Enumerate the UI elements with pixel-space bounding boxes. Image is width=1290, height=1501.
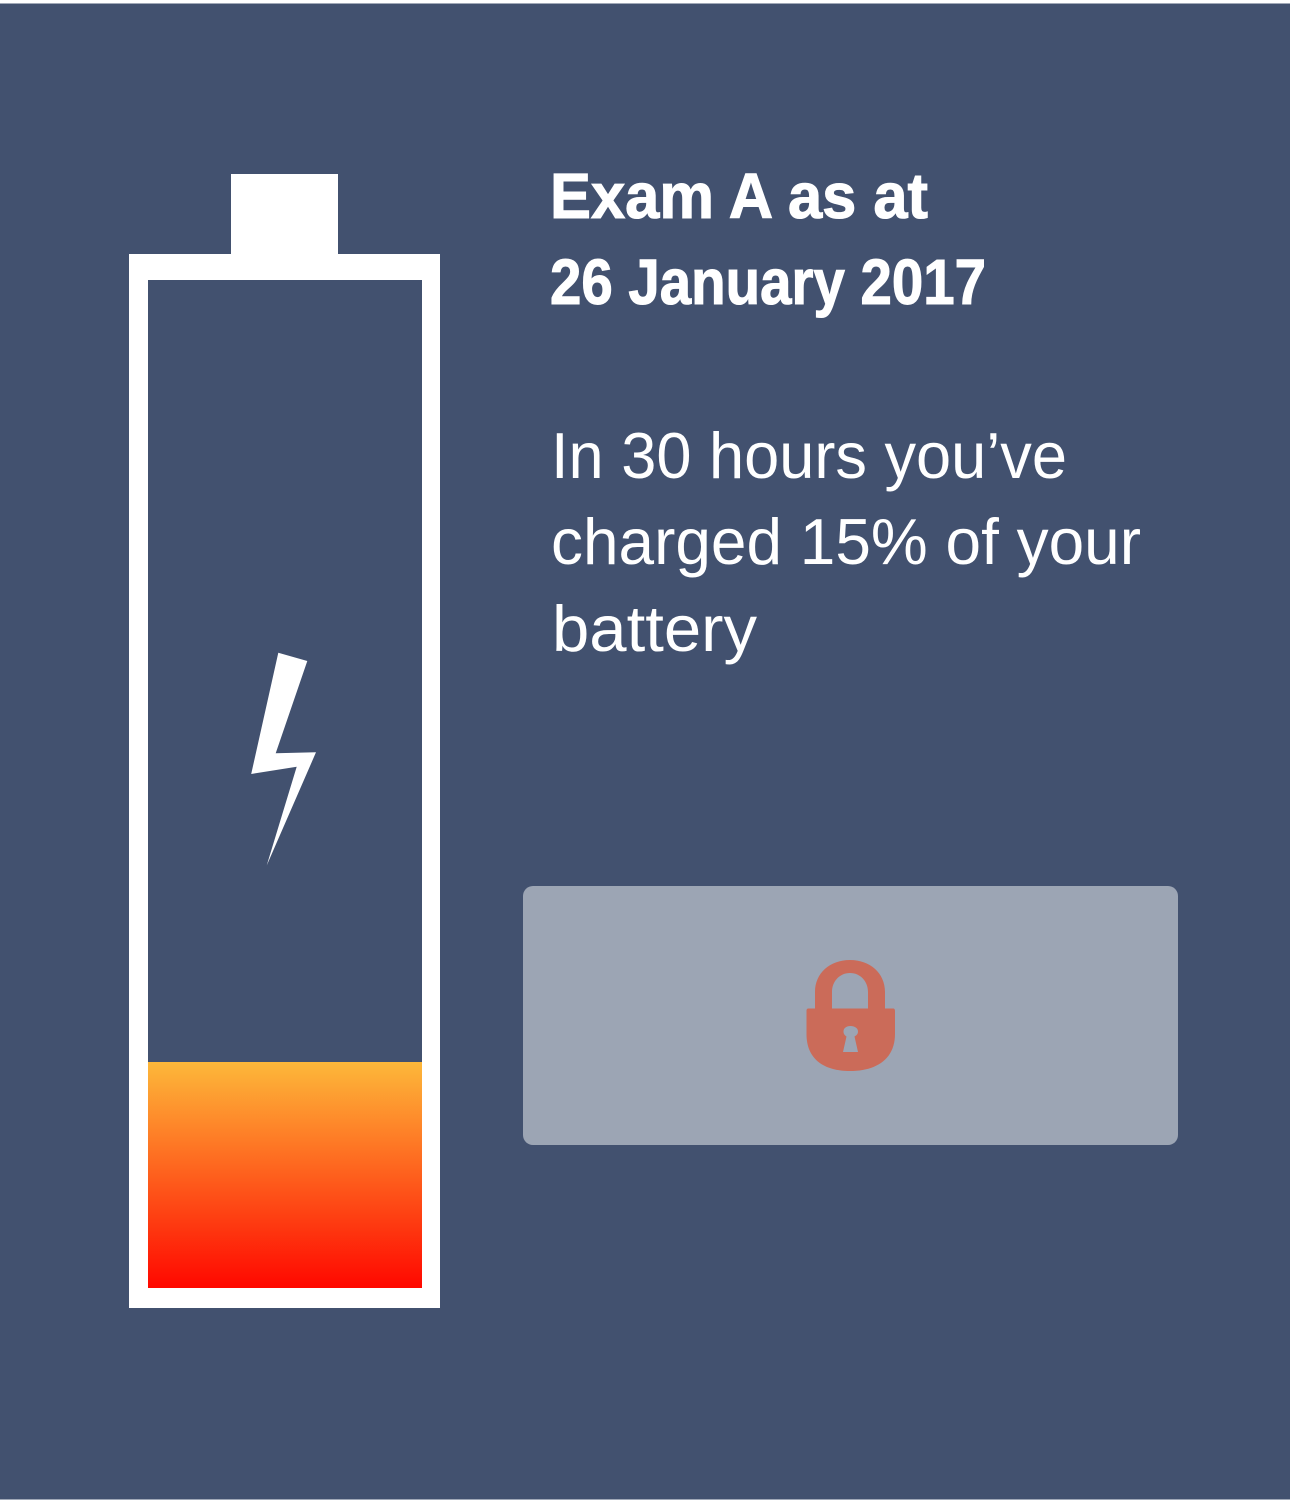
battery charge level 15% xyxy=(148,1062,422,1288)
icon: battery xyxy=(129,174,440,1308)
icon: lightning bolt xyxy=(251,653,316,866)
heading: Exam A as at xyxy=(550,160,928,232)
progress message: In 30 hours you’ve xyxy=(551,419,1067,492)
battery terminal xyxy=(231,174,338,255)
progress message xyxy=(551,419,1141,665)
icon: padlock xyxy=(806,960,895,1071)
battery casing xyxy=(129,254,440,1308)
progress message: charged 15% of your xyxy=(551,505,1141,578)
heading xyxy=(550,160,986,318)
panel background xyxy=(523,886,1178,1145)
progress message: battery xyxy=(552,592,758,665)
heading: 26 January 2017 xyxy=(550,246,986,318)
locked panel xyxy=(523,886,1178,1145)
